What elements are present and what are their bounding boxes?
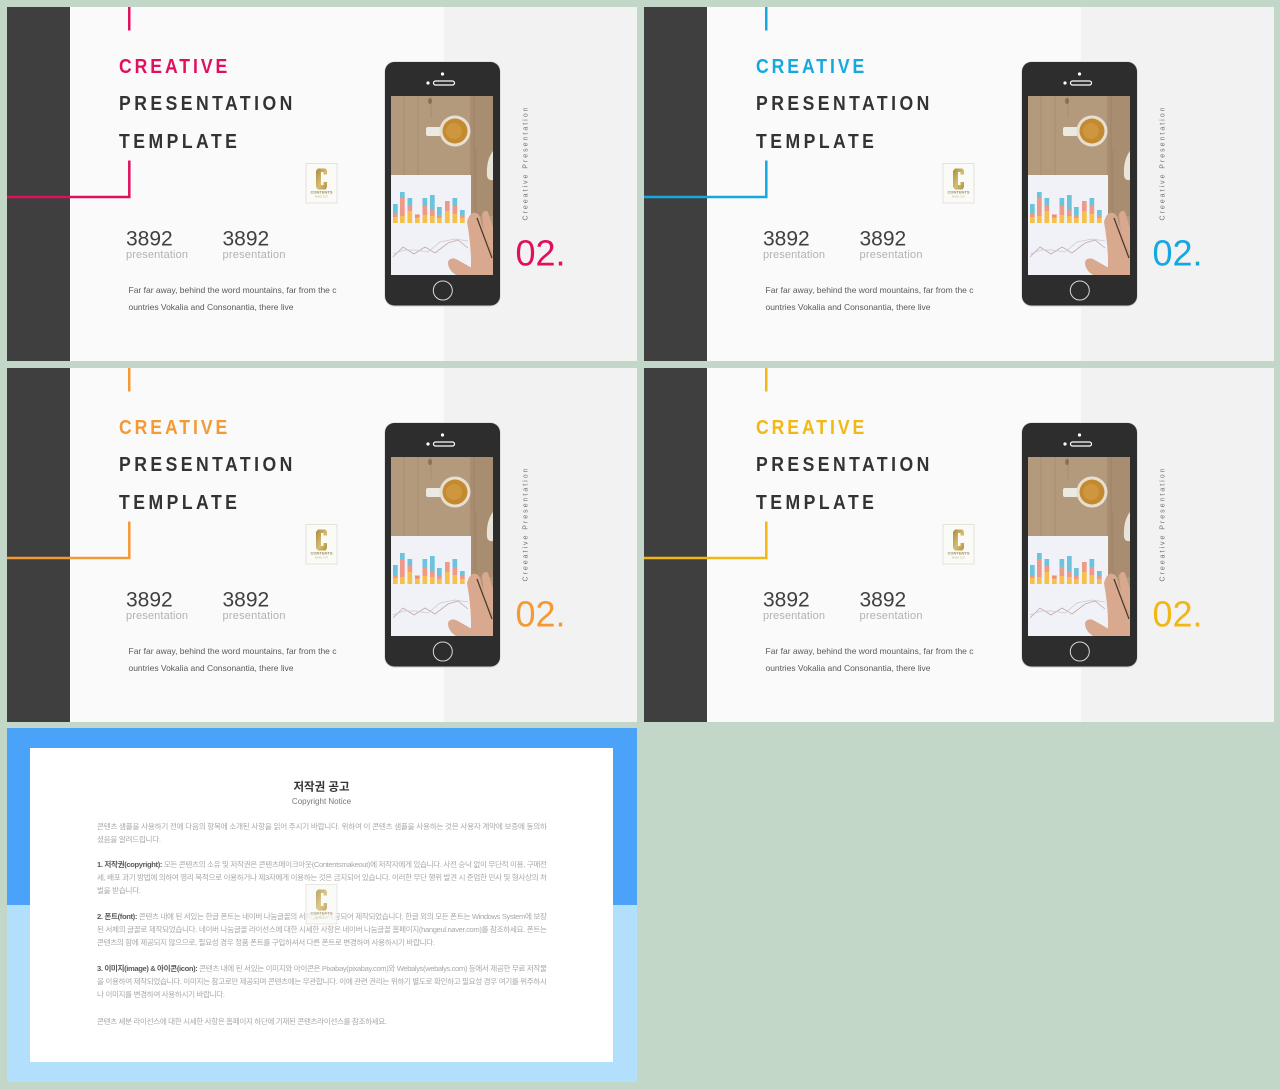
stat 2: presentation <box>860 610 922 622</box>
copyright notice slide <box>7 728 637 1082</box>
title: CREATIVE <box>119 416 227 438</box>
stat 1 <box>126 228 188 261</box>
body text <box>128 646 337 673</box>
body text: Far far away, behind the word mountains, far from the c <box>766 285 974 295</box>
vertical caption: Creeative Presentation <box>522 107 530 220</box>
title: TEMPLATE <box>756 491 874 513</box>
title: PRESENTATION <box>119 92 292 114</box>
section 1: copyright: 세, 배포 과기 방법에 의하여 영리 목적으로 이용하거나 제3자에게 이용하는 것은 금지되어 있습니다. 이러한 무단 행위 발견 시 준엄한 민사 및 형사상의 처 <box>97 872 547 882</box>
slide 1: pink <box>7 7 637 361</box>
white notice panel <box>30 748 613 1062</box>
slide number: 02. <box>1152 232 1202 274</box>
section 2: font: 콘텐츠의 함에 제공되지 않으므로, 필요성 경우 정품 폰트를 구입하셔서 다른 폰트로 변경하여 사용하시기 바랍니다. <box>97 937 435 947</box>
logo <box>943 164 974 203</box>
phone mockup <box>1022 62 1138 306</box>
stat 1: presentation <box>126 610 188 622</box>
body text: ountries Vokalia and Consonantia, there live <box>766 663 931 673</box>
slide number: 02. <box>1152 594 1202 634</box>
slide 2: blue <box>644 7 1274 361</box>
phone mockup <box>384 62 500 306</box>
body text <box>766 285 974 312</box>
intro paragraph: 콘텐츠 샘플을 사용하기 전에 다음의 항목에 소개된 사항을 읽어 주시기 바랍니다. 위하여 이 콘텐츠 샘플을 사용하는 것은 사용자 계약에 보증에 동의하 <box>97 821 547 831</box>
intro paragraph <box>97 821 547 844</box>
stat 2: presentation <box>860 249 922 261</box>
stat 1: presentation <box>763 249 825 261</box>
body text: Far far away, behind the word mountains, far from the c <box>128 646 337 656</box>
title: PRESENTATION <box>119 453 292 475</box>
title: PRESENTATION <box>756 453 929 475</box>
blue background top <box>7 728 637 905</box>
right shaded panel <box>1081 7 1274 361</box>
stat 1 <box>763 228 825 261</box>
notice heading: 저작권 공고 <box>293 780 350 794</box>
stat 1: 3892 <box>126 228 173 250</box>
right shaded panel <box>444 368 637 722</box>
slide panel <box>644 7 1274 361</box>
stat 1: presentation <box>763 610 825 622</box>
title: TEMPLATE <box>119 130 237 152</box>
title: PRESENTATION <box>756 92 929 114</box>
vertical caption: Creeative Presentation <box>522 468 530 582</box>
connector line <box>7 160 129 197</box>
section 3: image and icon: 나 이미지를 변경하여 사용하시기 바랍니다. <box>97 989 225 999</box>
stat 2: presentation <box>222 249 286 261</box>
section 3: image and icon <box>97 963 547 999</box>
phone mockup <box>1022 422 1138 668</box>
title: CREATIVE <box>756 55 864 77</box>
slide 3: orange <box>7 368 637 722</box>
section 2: font <box>97 911 547 947</box>
light blue background bottom <box>7 905 637 1082</box>
stat 1: presentation <box>126 249 188 261</box>
top accent line <box>765 7 768 30</box>
dark side bar <box>7 368 70 722</box>
title: TEMPLATE <box>119 491 237 513</box>
notice subheading: Copyright Notice <box>292 797 352 806</box>
stat 1 <box>763 588 825 622</box>
slide panel <box>7 7 637 361</box>
stat 2: 3892 <box>860 588 906 612</box>
intro paragraph: 셨음을 알려드립니다. <box>97 834 161 844</box>
vertical caption: Creeative Presentation <box>1160 107 1166 220</box>
title: TEMPLATE <box>756 130 874 152</box>
title <box>119 55 292 152</box>
logo <box>306 524 337 564</box>
connector line <box>644 160 766 197</box>
stat 2: 3892 <box>860 228 906 250</box>
dark side bar <box>644 368 707 722</box>
stat 1 <box>126 588 188 622</box>
body text <box>128 285 337 312</box>
title <box>119 416 292 513</box>
slide 4: yellow <box>644 368 1274 722</box>
phone mockup <box>384 422 500 668</box>
connector line <box>644 522 766 558</box>
title: CREATIVE <box>119 55 227 77</box>
section 1: copyright: 벌을 받습니다. <box>97 885 141 895</box>
section 1: copyright: 1. 저작권(copyright): 모든 콘텐츠의 소유 및 저작권은 콘텐츠메이크아웃(Contentsmakeout)에 저작자에게 있습니다. 사전 승낙 없이 무단적 이용, 구매전 <box>97 859 547 869</box>
vertical caption: Creeative Presentation <box>1160 468 1166 582</box>
stat 1: 3892 <box>763 228 810 250</box>
section 2: font: 2. 폰트(font): 콘텐츠 내에 된 서있는 한글 폰트는 네이버 나눔글꼴의 서체들로 제공되어 제작되었습니다. 한글 외의 모든 폰트는 Windows System에 보장 <box>97 911 547 921</box>
stat 1: 3892 <box>126 588 173 612</box>
body text: ountries Vokalia and Consonantia, there live <box>128 302 294 312</box>
top accent line <box>128 7 130 30</box>
stat 2: 3892 <box>222 588 269 612</box>
body text: Far far away, behind the word mountains, far from the c <box>128 285 337 295</box>
slide number: 02. <box>516 594 566 634</box>
title <box>756 55 929 152</box>
closing line: 콘텐츠 세분 라이선스에 대한 시세한 사항은 홈페이지 하단에 기재된 콘텐츠라이선스를 참조하세요. <box>97 1016 387 1026</box>
stat 2: 3892 <box>222 228 269 250</box>
stat 1: 3892 <box>763 588 810 612</box>
top accent line <box>765 368 768 392</box>
stat 2: presentation <box>222 610 286 622</box>
body text <box>766 646 974 673</box>
watermark logo <box>306 884 337 924</box>
body text: Far far away, behind the word mountains, far from the c <box>766 646 974 656</box>
dark side bar <box>644 7 707 361</box>
stat 2 <box>222 228 286 261</box>
stat 2 <box>860 588 922 622</box>
section 2: font: 된 서체의 글꼴로 제작되었습니다. 네이버 나눔글꼴 라이선스에 대한 시세한 사항은 네이버 나눔글꼴 홈페이지(hangeul.naver.com)를 참조하세요. 폰트는 <box>97 924 547 934</box>
slide number: 02. <box>516 232 566 274</box>
slide panel <box>644 368 1274 722</box>
logo <box>943 524 974 564</box>
top accent line <box>128 368 130 392</box>
slide panel <box>7 368 637 722</box>
section 3: image and icon: 3. 이미지(image) & 아이콘(icon): 콘텐츠 내에 된 서있는 이미지와 아이콘은 Pixabay(pixabay.com)와 Webalys(webalys.com) 등에서 제공한 무료 저작물 <box>97 963 547 973</box>
stat 2 <box>222 588 286 622</box>
section 1: copyright <box>97 859 547 895</box>
dark side bar <box>7 7 70 361</box>
body text: ountries Vokalia and Consonantia, there live <box>766 302 931 312</box>
right shaded panel <box>444 7 637 361</box>
section 3: image and icon: 을 이용하여 제작되었습니다. 이미지는 참고로만 제공되며 콘텐츠에는 무관합니다. 이에 관련 권리는 위하기 별도로 확인하고 필요성 경우 여기를 위주하시 <box>97 976 547 986</box>
title <box>756 416 929 513</box>
logo <box>306 164 337 203</box>
right shaded panel <box>1081 368 1274 722</box>
stat 2 <box>860 228 922 261</box>
body text: ountries Vokalia and Consonantia, there live <box>128 663 294 673</box>
title: CREATIVE <box>756 416 864 438</box>
connector line <box>7 522 129 558</box>
